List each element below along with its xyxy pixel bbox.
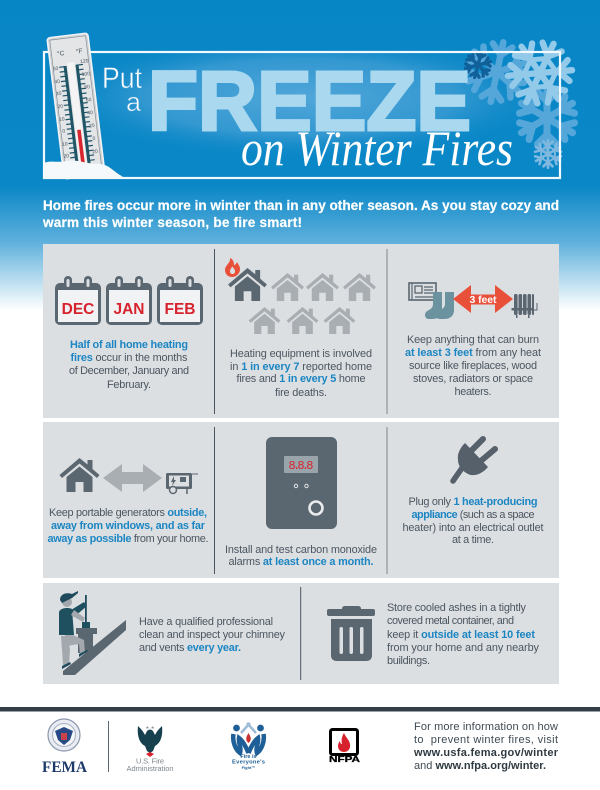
text: store ashes [387, 602, 540, 667]
intro heading [42, 198, 559, 230]
text: half of fires: fires occur in the months [70, 352, 188, 364]
text: test alarms: alarms at least once a month. [228, 556, 374, 568]
text: plug one appliance: heater) into an electrical outlet [402, 522, 544, 534]
icon: thermometer: 120 [80, 58, 89, 65]
panel: row 1 [43, 244, 559, 418]
text: heating equipment: fires and 1 in every 5 home [236, 373, 366, 385]
footer text: more information: www.usfa.fema.gov/winter [413, 747, 559, 759]
icon: socks [425, 292, 454, 319]
icon: chimney sweep on roof [59, 591, 126, 675]
logo: U.S. Fire Administration: U.S. Fire [136, 756, 164, 766]
text: generators [48, 507, 208, 545]
footer text: more information: and www.nfpa.org/winter. [414, 760, 546, 772]
icon: thermometer: 0 [92, 136, 96, 142]
logo: NFPA: NFPA [329, 754, 360, 764]
text: test alarms [225, 544, 377, 568]
text: half of fires [69, 339, 189, 391]
text: chimney inspection: Have a qualified professional [139, 616, 273, 628]
icon: thermometer: 60 [86, 97, 92, 104]
icon: thermometer: 40 [87, 110, 94, 117]
logo: Fire is Everyone's Fight: Fire is [240, 754, 257, 760]
icon: thermometer: 20 [89, 123, 95, 130]
divider [300, 587, 302, 680]
text: store ashes: covered metal container, and [387, 615, 514, 627]
footer text: more information: For more information on how [414, 721, 558, 733]
calendars DEC JAN FEB [55, 276, 203, 325]
logo: FEMA [42, 719, 88, 776]
icon: thermometer: °C [57, 49, 65, 58]
text: plug one appliance [402, 496, 544, 546]
text: chimney inspection: clean and inspect your chimney [139, 629, 286, 641]
divider [386, 249, 388, 414]
blue background gradient [0, 0, 600, 310]
icon: newspaper and socks, 3 feet arrow, radiator [409, 283, 537, 319]
text: store ashes: from your home and any nearby [387, 642, 540, 654]
icon: thermometer: 30 [56, 91, 62, 97]
icon: thermometer: 20 [57, 104, 64, 110]
logo divider [108, 721, 110, 772]
logo: U.S. Fire Administration: Administration [126, 764, 174, 773]
text: plug one appliance: appliance (such as a space [412, 509, 534, 521]
icon: house, arrow, generator [60, 458, 198, 494]
text: store ashes: Store cooled ashes in a tightly [387, 602, 527, 614]
icon: thermometer: °F [75, 47, 83, 56]
icon: thermometer: 100 [81, 71, 91, 78]
panel: row 3 [43, 583, 559, 684]
text: keep 3 feet: Keep anything that can burn [407, 334, 539, 346]
title: Put a [102, 62, 143, 117]
logo: U.S. Fire Administration [126, 725, 174, 773]
banner inner glow [44, 52, 560, 178]
calendars DEC JAN FEB: FEB [164, 301, 196, 318]
icon: thermometer: 10 [59, 116, 65, 123]
icon: burning house and six houses [225, 258, 376, 334]
footer text: more information: to prevent winter fires, visit [414, 734, 558, 746]
title: FREEZE: FREEZE [148, 54, 471, 148]
text: keep 3 feet [405, 334, 541, 398]
icon: snow drift [43, 161, 125, 179]
panel: row 2 [43, 422, 559, 578]
icon: newspaper and socks, 3 feet arrow, radiator: 3 feet [470, 294, 497, 306]
text: store ashes: keep it outside at least 10 feet [387, 629, 535, 641]
icon: thermometer: 50 [53, 66, 59, 72]
logo: Fire is Everyone's Fight: Everyone's [232, 760, 265, 766]
icon: thermometer: 80 [84, 84, 90, 91]
logo: Fire is Everyone's Fight: Fight™ [242, 765, 255, 770]
text: heating equipment: in 1 in every 7 reported home [230, 361, 372, 373]
icon: carbon monoxide alarm [266, 437, 337, 529]
text: generators: away as possible from your home. [48, 533, 208, 545]
divider [386, 427, 388, 574]
text: chimney inspection [139, 616, 286, 654]
text: keep 3 feet: stoves, radiators or space [413, 373, 533, 385]
icon: thermometer: 10 [62, 141, 68, 148]
arrow: 3 feet [453, 285, 513, 313]
text: half of fires: Half of all home heating [70, 339, 188, 351]
text: half of fires: February. [107, 379, 151, 391]
text: store ashes: buildings. [387, 655, 430, 667]
panel background [43, 583, 559, 684]
panel background [43, 244, 559, 418]
divider [214, 249, 216, 414]
text: generators: Keep portable generators outside, [49, 507, 207, 519]
text: half of fires: of December, January and [69, 365, 189, 377]
text: heating equipment: Heating equipment is involved [230, 348, 372, 360]
text: generators: away from windows, and as far [51, 520, 206, 532]
logo: FEMA: FEMA [42, 759, 88, 776]
icon: newspaper [409, 283, 436, 300]
snowflakes [460, 30, 584, 168]
intro heading: warm this winter season, be fire smart! [42, 215, 302, 230]
icon: thermometer: 30 [65, 165, 71, 172]
title: on Winter Fires: on Winter Fires [241, 120, 513, 176]
icon: thermometer: 20 [92, 149, 98, 155]
text: keep 3 feet: at least 3 feet from any heat [405, 347, 541, 359]
title: Put a: Put [102, 62, 143, 95]
calendars DEC JAN FEB: JAN [113, 301, 145, 318]
footer text: more information [413, 721, 559, 772]
text: heating equipment [230, 348, 372, 399]
icon: thermometer: 20 [63, 153, 70, 160]
intro heading: Home fires occur more in winter than in any other season. As you stay cozy and [43, 198, 559, 213]
logo: NFPA [329, 730, 360, 764]
banner frame [44, 52, 560, 178]
icon: electric plug [453, 439, 495, 481]
text: heating equipment: fire deaths. [275, 387, 327, 399]
icon: thermometer [47, 33, 105, 179]
text: plug one appliance: at a time. [452, 534, 494, 546]
icon: radiator [512, 294, 537, 318]
icon: carbon monoxide alarm: 8.8.8 [288, 459, 314, 473]
text: keep 3 feet: source like fireplaces, wood [409, 360, 537, 372]
title: Put a: a [126, 87, 142, 117]
text: keep 3 feet: heaters. [454, 386, 492, 398]
footer bar [0, 707, 600, 712]
icon: thermometer: 40 [54, 79, 61, 85]
icon: thermometer: 0 [62, 128, 66, 135]
title banner [43, 30, 584, 179]
icon: metal trash can [327, 606, 375, 661]
text: test alarms: Install and test carbon monoxide [225, 544, 377, 556]
logo: Fire is Everyone's Fight [232, 723, 265, 770]
calendars DEC JAN FEB: DEC [62, 301, 94, 318]
text: plug one appliance: Plug only 1 heat-producing [408, 496, 538, 508]
panel background [43, 422, 559, 578]
divider [214, 427, 216, 574]
logo: U.S. Fire Administration: ★ ★ [145, 725, 156, 730]
text: chimney inspection: and vents every year. [139, 642, 241, 654]
